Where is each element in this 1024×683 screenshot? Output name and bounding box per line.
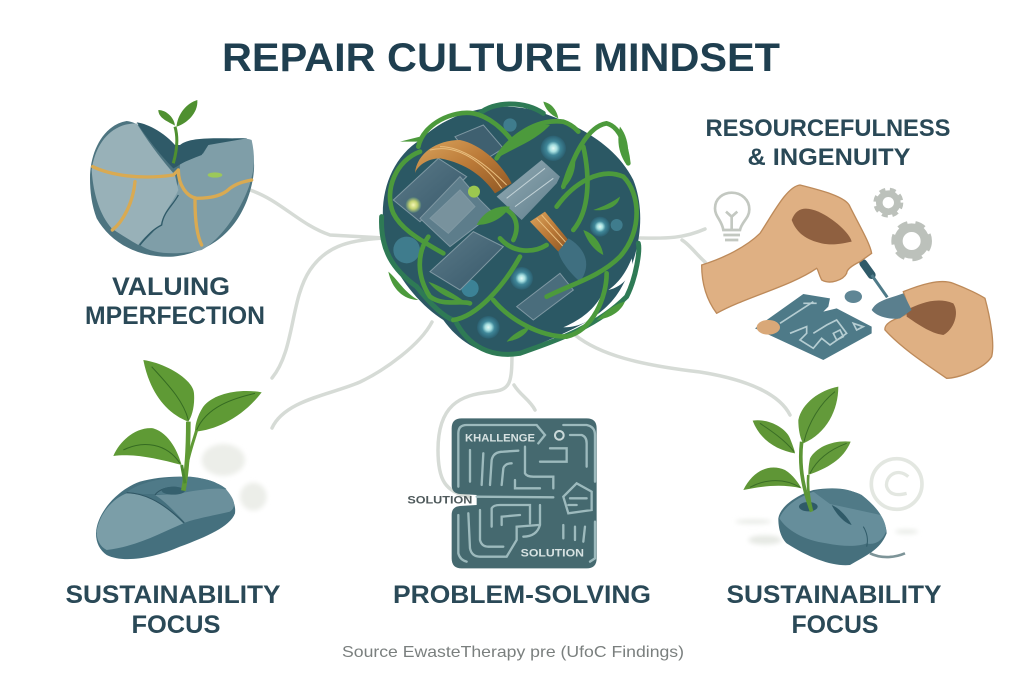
- screwdriver: [863, 263, 872, 275]
- icon: cracked stone with sprout: [90, 100, 254, 257]
- vine leaves: [388, 102, 628, 342]
- label: sustainability focus right: [726, 581, 942, 639]
- ground smudges: [735, 520, 918, 545]
- label: resourcefulness and ingenuity: RESOURCEFULNESS: [706, 115, 950, 142]
- glowing orbs: [393, 118, 623, 339]
- maze text: SOLUTION: [407, 495, 472, 507]
- icon: central knot of electronics and vines: [382, 102, 640, 355]
- circuit blocks: [393, 125, 573, 320]
- copper wire: [415, 140, 586, 282]
- maze text: SOLUTION: [521, 548, 584, 560]
- label: valuing imperfection: MPERFECTION: [85, 302, 265, 330]
- recycle swirl: [871, 459, 922, 509]
- label: sustainability focus left: FOCUS: [132, 611, 220, 639]
- icon: right mouse with plant: [735, 387, 922, 565]
- maze text: KHALLENGE: [465, 433, 535, 445]
- right hand: [885, 282, 993, 378]
- circuit board piece: [755, 290, 872, 360]
- plant: [743, 387, 851, 512]
- gaps between vines: [563, 258, 632, 327]
- icon: hands repairing circuit board: [702, 185, 993, 378]
- label: sustainability focus right: SUSTAINABILITY: [726, 581, 942, 609]
- plant: [113, 360, 262, 491]
- icon: left mouse with plant: [96, 360, 267, 559]
- connector lines: [250, 190, 790, 497]
- title: REPAIR CULTURE MINDSET: [222, 36, 780, 80]
- icon: light bulb: [715, 193, 749, 240]
- maze text: [407, 433, 584, 560]
- dust smudges: [202, 444, 267, 511]
- vines: [382, 104, 639, 354]
- light circuit block: [497, 160, 560, 220]
- source note: Source EwasteTherapy pre (UfoC Findings): [342, 644, 684, 661]
- label: sustainability focus right: FOCUS: [792, 611, 878, 639]
- label: resourcefulness and ingenuity: & INGENUITY: [748, 144, 910, 171]
- icon: maze: [407, 418, 597, 568]
- label: sustainability focus left: SUSTAINABILITY: [66, 581, 281, 609]
- icon: gears: [875, 189, 930, 259]
- label: valuing imperfection: [85, 273, 265, 330]
- label: resourcefulness and ingenuity: [706, 115, 950, 171]
- label: sustainability focus left: [66, 581, 281, 639]
- label: valuing imperfection: VALUING: [112, 273, 230, 301]
- left hand: [702, 185, 872, 313]
- label: problem-solving: PROBLEM-SOLVING: [393, 581, 651, 609]
